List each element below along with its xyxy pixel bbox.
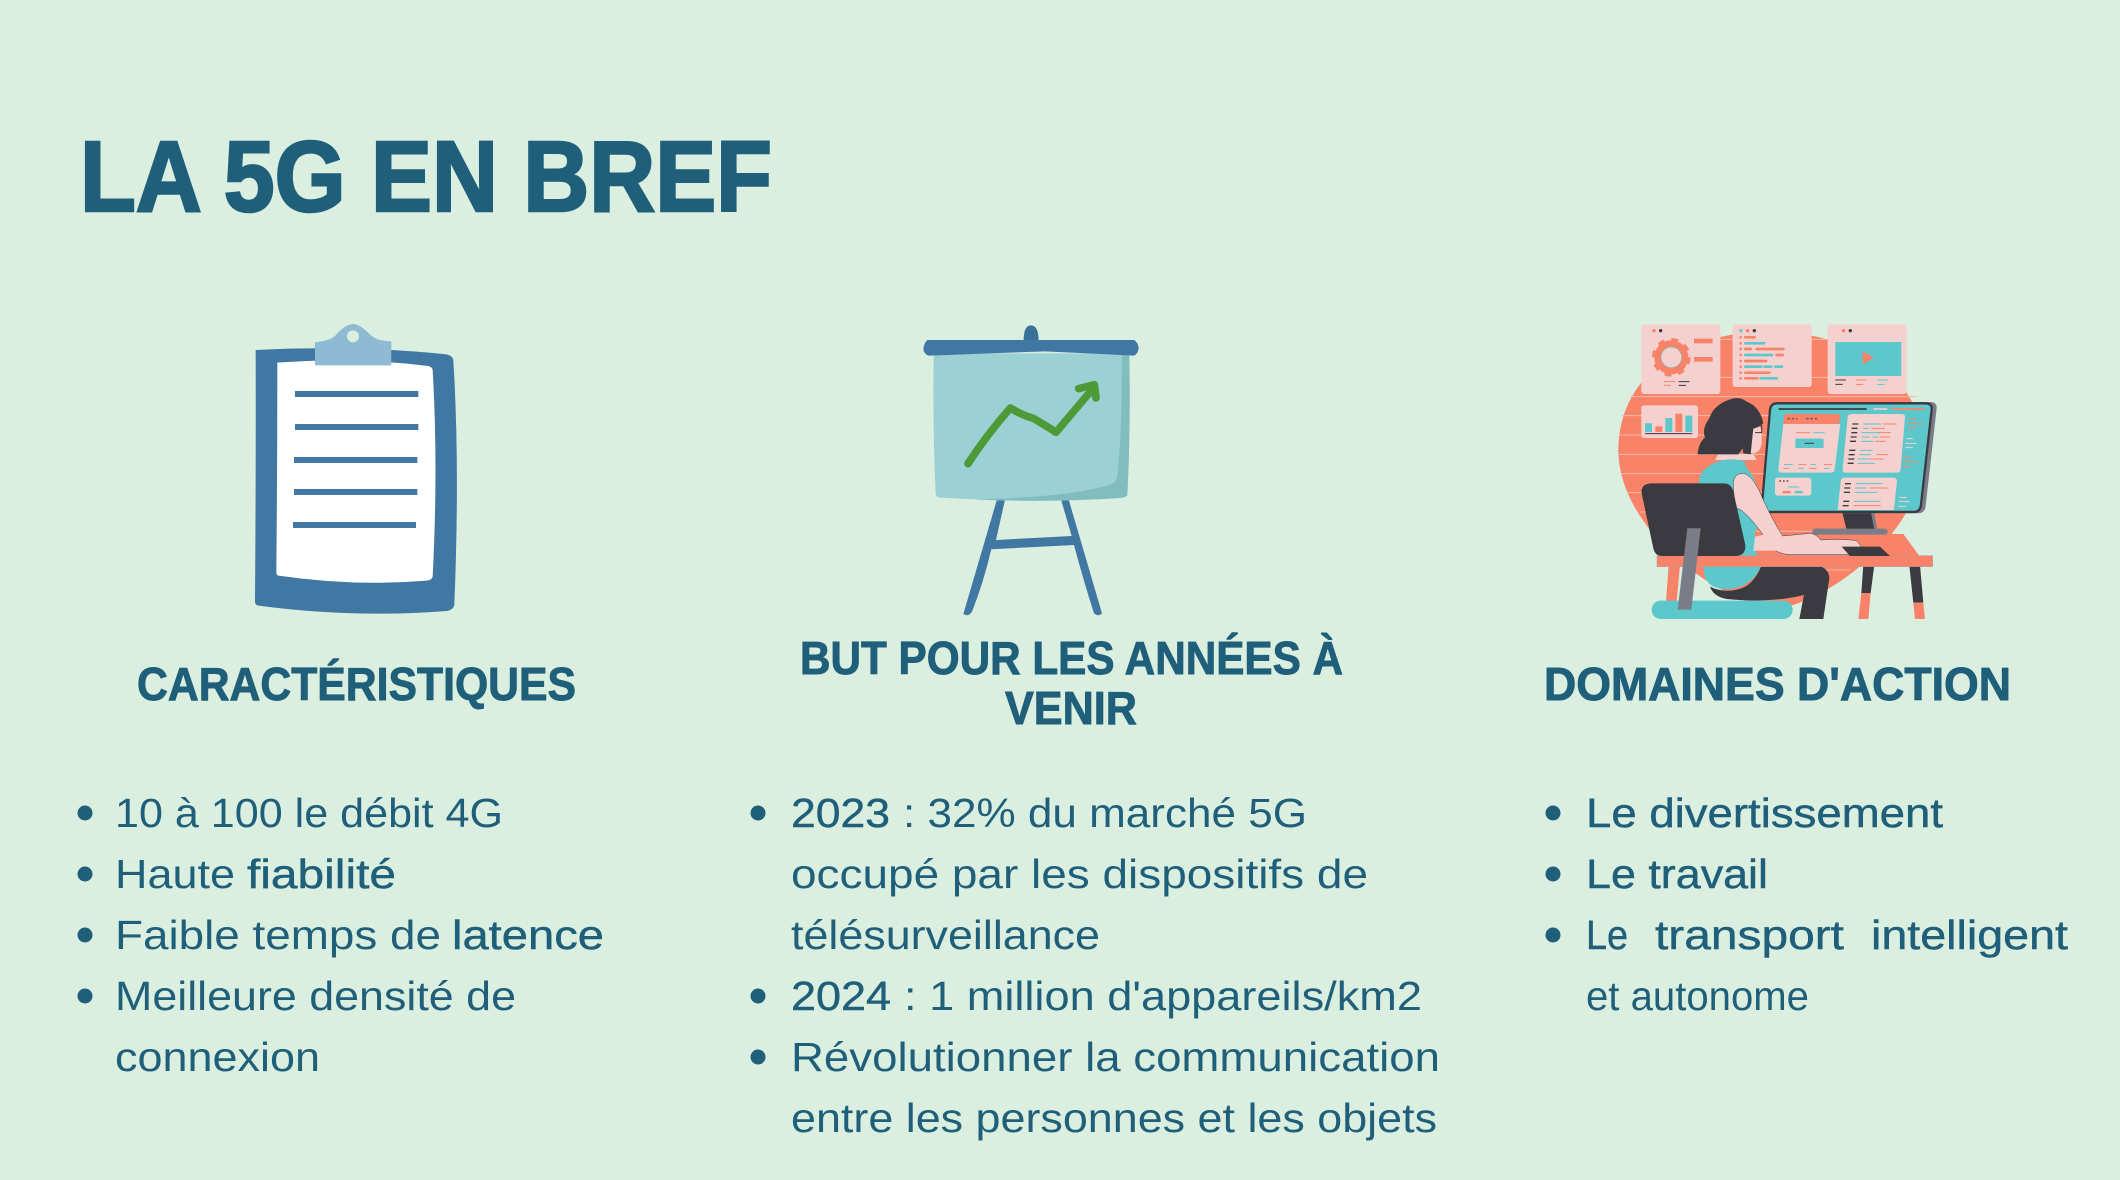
desk	[1666, 534, 1926, 619]
bullet list: domaines: Le	[1586, 912, 1628, 958]
bullet list: but: entre les personnes et les objets	[791, 1095, 1437, 1141]
background blob	[1618, 332, 1925, 605]
woman	[1698, 398, 1863, 619]
bullet list: but: : 32% du marché 5G	[903, 790, 1307, 836]
bullet list: caractéristiques: fiabilité	[247, 851, 396, 897]
bullet list: caractéristiques: 10 à 100 le débit 4G	[115, 790, 503, 836]
panel: but pour les années à venir	[750, 325, 1440, 1141]
bullet list: but: télésurveillance	[791, 912, 1100, 958]
bullet list: caractéristiques: connexion	[115, 1034, 320, 1080]
icon: presentation board	[923, 325, 1139, 615]
bullet list: but: : 1 million d'appareils/km2	[904, 973, 1422, 1019]
icon: clipboard	[255, 324, 457, 614]
bullet list: domaines: Le travail	[1586, 851, 1768, 897]
keyboard	[1842, 547, 1890, 556]
bullet list: but: Révolutionner la communication	[791, 1034, 1440, 1080]
chair	[1642, 483, 1793, 619]
bullet list: but: 2023	[791, 790, 890, 836]
floating windows	[1641, 324, 1907, 438]
heading: but pour les années à venir	[800, 632, 1343, 734]
bullet list: caractéristiques: latence	[452, 912, 604, 958]
bullet list: domaines: transport	[1655, 912, 1845, 958]
bullet list: caractéristiques: Faible temps de	[115, 912, 441, 958]
bullet list: domaines: intelligent	[1871, 912, 2069, 958]
heading: domaines d'action: DOMAINES D'ACTION	[1544, 658, 2011, 710]
bullet list: caractéristiques	[78, 790, 604, 1080]
bullet list: domaines: et autonome	[1586, 973, 1809, 1019]
monitor	[1762, 402, 1937, 535]
bullet list: but: 2024	[791, 973, 891, 1019]
heading: but pour les années à venir: VENIR	[1005, 682, 1137, 734]
panel: caractéristiques	[78, 324, 604, 1080]
heading: caractéristiques: CARACTÉRISTIQUES	[137, 658, 576, 710]
bullet list: but: occupé par les dispositifs de	[791, 851, 1368, 897]
heading: but pour les années à venir: BUT POUR LES ANNÉES À	[800, 632, 1343, 684]
panel: domaines d'action	[1544, 324, 2069, 1019]
bullet list: caractéristiques: Haute	[115, 851, 235, 897]
desk top	[1657, 556, 1933, 567]
bullet list: caractéristiques: Meilleure densité de	[115, 973, 516, 1019]
bullet list: domaines	[1546, 790, 2069, 1019]
bullet list: but	[750, 790, 1440, 1141]
bullet list: domaines: Le divertissement	[1586, 790, 1944, 836]
title: LA 5G EN BREF	[80, 121, 772, 233]
icon: woman working at computer	[1618, 324, 1937, 619]
